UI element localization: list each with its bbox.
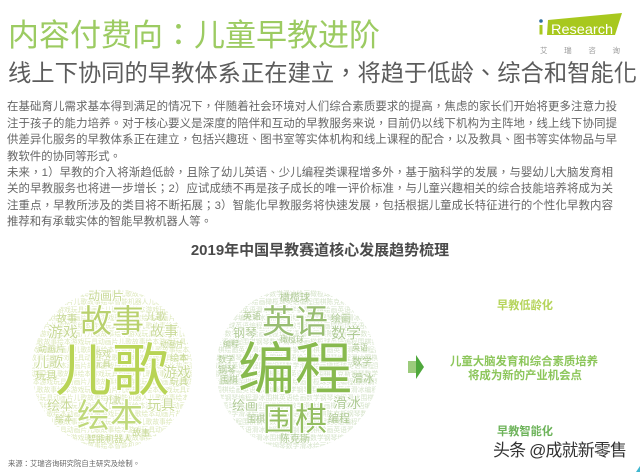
watermark: 头条 @成就新零售 <box>493 441 627 460</box>
word cloud: early education skills: 围棋绘画英语滑冰编程数学钢琴围棋绘画英语滑冰编程数学钢琴围棋绘画 <box>211 425 429 434</box>
word cloud: early education skills: 英语 <box>243 310 261 321</box>
word cloud: early education content: 游戏 <box>163 364 191 380</box>
word cloud: early education content: 动画片儿歌故事绘本游戏玩具动画片儿歌故事绘本游戏玩具动画片儿歌故事 <box>30 369 254 378</box>
corner mark <box>636 466 640 472</box>
word cloud: early education skills <box>216 290 378 449</box>
body text: 供差异化服务的早教体系正在建立，包括兴趣班、图书室等实体机构和线上课程的配合，以及教具、图书等实体物品与早 <box>7 132 617 146</box>
subtitle: 线上下协同的早教体系正在建立，将趋于低龄、综合和智能化 <box>8 60 637 86</box>
word cloud: early education skills: 钢琴数学滑冰绘画橄榄球英语编程围棋陈克斯钢琴数学滑冰绘画橄榄球英语 <box>211 329 435 338</box>
title: 内容付费向：儿童早教进阶 <box>8 18 380 53</box>
word cloud: early education skills: 橄榄球英语编程围棋钢琴数学滑冰绘画橄榄球英语编程围棋钢琴数学滑冰 <box>211 441 429 450</box>
word cloud: early education skills: 橄榄球 <box>280 291 310 304</box>
word cloud: early education skills: 围棋 <box>263 401 327 437</box>
word cloud: early education content: 游戏玩具动画片儿歌故事绘本智能机器人儿歌故事绘本游戏玩具动画片儿歌 <box>26 297 250 306</box>
trend: brain development and quality cultivation: 将成为新的产业机会点 <box>468 368 583 382</box>
word cloud: early education content: 故事绘本游戏玩具动画片儿歌故事绘本游戏玩具动画片儿歌故事绘本游戏 <box>30 305 248 314</box>
word cloud: early education skills: 绘画 <box>232 398 258 413</box>
word cloud: early education skills: 围棋 <box>247 413 265 424</box>
word cloud: early education content: 故事绘本游戏玩具动画片儿歌故事绘本游戏玩具动画片儿歌故事绘本游戏 <box>30 353 248 362</box>
chart heading: 2019年中国早教赛道核心发展趋势梳理 <box>191 241 449 259</box>
word cloud: early education content: 游戏玩具动画片儿歌故事绘本智能机器人儿歌故事绘本游戏玩具动画片儿歌 <box>26 345 250 354</box>
word cloud: early education skills: 围棋绘画英语滑冰编程数学钢琴围棋绘画英语滑冰编程数学钢琴围棋绘画 <box>211 345 429 354</box>
word cloud: early education skills: 数学钢琴编程滑冰围棋英语绘画数学钢琴编程滑冰围棋英语绘画数学钢琴 <box>215 433 433 442</box>
word cloud: early education skills: 橄榄球英语编程围棋钢琴数学滑冰绘画橄榄球英语编程围棋钢琴数学滑冰 <box>211 361 429 370</box>
word cloud: early education skills: 钢琴 <box>218 364 236 375</box>
word cloud: early education skills: 绘画 <box>331 312 351 325</box>
word cloud: early education skills: 围棋绘画英语滑冰编程数学钢琴围棋绘画英语滑冰编程数学钢琴围棋绘画 <box>215 385 433 394</box>
word cloud: early education content: 绘本游戏玩具动画片儿歌故事绘本游戏玩具动画片儿歌故事绘本游戏玩具 <box>26 329 244 338</box>
body text: 未来，1）早教的介入将渐趋低龄，且除了幼儿英语、少儿编程类课程增多外，基于脑科学的发展，与婴幼儿大脑发育相 <box>7 165 613 179</box>
word cloud: early education content: 绘本 <box>55 413 73 424</box>
logo: iResearch: Research <box>551 21 613 37</box>
body text: 注于孩子的能力培养。对于核心要义是深度的陪伴和互动的早教服务来说，目前仍以线下机构为主阵地，线上线下协同提 <box>7 116 618 130</box>
word cloud: early education content: 故事 <box>132 427 150 438</box>
source note: 来源：艾瑞咨询研究院自主研究及绘制。 <box>8 459 140 468</box>
word cloud: early education content: 游戏玩具动画片儿歌故事绘本智能机器人儿歌故事绘本游戏玩具动画片儿歌 <box>26 441 250 450</box>
word cloud: early education content: 玩具儿歌绘本动画片故事游戏玩具儿歌绘本动画片故事游戏玩具儿歌绘本 <box>26 361 244 370</box>
word cloud: early education content: 绘本 <box>47 398 73 413</box>
word cloud: early education skills: 围棋绘画英语滑冰编程数学钢琴围棋绘画英语滑冰编程数学钢琴围棋绘画 <box>215 305 433 314</box>
word cloud: early education content: 绘本游戏玩具动画片儿歌故事绘本游戏玩具动画片儿歌故事绘本游戏玩具 <box>26 425 244 434</box>
word cloud: early education content <box>32 290 192 449</box>
word cloud: early education content: 绘本 <box>170 352 188 363</box>
word cloud: early education skills: 英语编程围棋钢琴数学滑冰绘画橄榄球英语编程围棋钢琴数学滑冰绘画 <box>215 417 426 426</box>
word cloud: early education skills: 滑冰 <box>352 372 374 385</box>
word cloud: early education content: 智能机器人 <box>87 433 132 444</box>
word cloud: early education skills: 编程 <box>238 338 352 402</box>
trend: intelligent: 早教智能化 <box>497 424 553 438</box>
word cloud: early education content: 绘本游戏玩具动画片儿歌故事绘本游戏玩具动画片儿歌故事绘本游戏玩具 <box>26 377 244 386</box>
word cloud: early education skills: 钢琴数学滑冰绘画橄榄球英语编程围棋陈克斯钢琴数学滑冰绘画橄榄球英语 <box>211 409 435 418</box>
word cloud: early education skills: 英语编程围棋钢琴数学滑冰绘画橄榄球英语编程围棋钢琴数学滑冰绘画 <box>215 289 426 298</box>
word cloud: early education skills: 钢琴数学滑冰绘画橄榄球英语编程围棋陈克斯钢琴数学滑冰绘画橄榄球英语 <box>211 297 435 306</box>
word cloud: early education skills: 围棋 <box>220 374 238 385</box>
logo: iResearch: 艾瑞咨询 <box>540 45 620 55</box>
word cloud: early education content: 玩具 <box>170 377 188 387</box>
word cloud: early education skills: 陈克斯 <box>280 432 310 445</box>
word cloud: early education content: 动画片儿歌故事绘本游戏玩具动画片儿歌故事绘本游戏玩具动画片儿歌故事 <box>30 321 254 330</box>
word cloud: early education content: 儿歌 <box>146 310 166 323</box>
word cloud: early education content: 故事 <box>80 303 144 339</box>
word cloud: early education skills: 数学钢琴编程滑冰围棋英语绘画数学钢琴编程滑冰围棋英语绘画数学钢琴 <box>215 353 433 362</box>
word cloud: early education content: 故事 <box>57 312 77 325</box>
body text <box>7 99 618 228</box>
word cloud: early education skills: 橄榄球英语编程围棋钢琴数学滑冰绘画橄榄球英语编程围棋钢琴数学滑冰 <box>215 321 433 330</box>
word cloud: early education content: 儿歌故事绘本游戏玩具动画片儿歌故事绘本游戏玩具动画片儿歌故事绘本 <box>30 385 248 394</box>
word cloud: early education content: 儿歌 <box>105 395 121 405</box>
body text: 教软件的协同等形式。 <box>7 149 121 163</box>
word cloud: early education content: 儿歌故事绘本游戏玩具动画片儿歌故事绘本游戏玩具动画片儿歌故事绘本 <box>30 337 248 346</box>
word cloud: early education skills: 英语编程围棋钢琴数学滑冰绘画橄榄球英语编程围棋钢琴数学滑冰绘画 <box>211 377 422 386</box>
word cloud: early education content: 动画片 <box>160 339 184 349</box>
word cloud: early education skills: 数学钢琴编程滑冰围棋英语绘画数学钢琴编程滑冰围棋英语绘画数学钢琴 <box>211 313 429 322</box>
body text: 注重点，早教所涉及的类目将不断拓展；3）智能化早教服务将快速发展，包括根据儿童成长特征进行的个性化早教内容 <box>7 198 613 212</box>
word cloud: early education content: 动画片 <box>88 289 124 303</box>
word cloud: early education content: 动画片儿歌故事绘本游戏玩具动画片儿歌故事绘本游戏玩具动画片儿歌故事 <box>30 417 254 426</box>
body text: 推荐和有承载实体的智能早教机器人等。 <box>7 214 212 228</box>
word cloud: early education skills: 橄榄球英语编程围棋钢琴数学滑冰绘画橄榄球英语编程围棋钢琴数学滑冰 <box>215 401 433 410</box>
word cloud: early education content: 绘本 <box>77 397 143 434</box>
word cloud: early education content: 儿歌 <box>55 339 169 403</box>
word cloud: early education skills: 数学 <box>331 325 361 342</box>
word cloud: early education content: 动画片 <box>38 343 65 354</box>
word cloud: early education content: 玩具 <box>35 369 57 382</box>
word cloud: early education skills: 钢琴数学滑冰绘画橄榄球英语编程围棋陈克斯钢琴数学滑冰绘画橄榄球英语 <box>215 369 439 378</box>
word cloud: early education skills: 编程 <box>223 339 239 349</box>
body text: 关的早教服务也将进一步增长；2）应试成绩不再是孩子成长的唯一评价标准，与儿童兴趣相关的综合技能培养将成为关 <box>7 181 613 195</box>
word cloud: early education skills: 英语编程围棋钢琴数学滑冰绘画橄榄球英语编程围棋钢琴数学滑冰绘画 <box>215 337 426 346</box>
word cloud: early education skills: 英语 <box>262 303 328 340</box>
word cloud: early education content: 游戏 <box>48 324 78 341</box>
word cloud: early education content: 儿歌故事绘本游戏玩具动画片儿歌故事绘本游戏玩具动画片儿歌故事绘本 <box>30 433 248 442</box>
word cloud: early education content: 玩具 <box>93 359 111 369</box>
word cloud: early education content: 儿歌 <box>35 354 63 370</box>
word cloud: early education content: 故事 <box>150 323 178 339</box>
word cloud: early education content: 游戏玩具动画片儿歌故事绘本智能机器人儿歌故事绘本游戏玩具动画片儿歌 <box>26 393 250 402</box>
word cloud: early education content: 玩具儿歌绘本动画片故事游戏玩具儿歌绘本动画片故事游戏玩具儿歌绘本 <box>26 313 244 322</box>
word cloud: early education skills: 钢琴 <box>233 326 257 340</box>
word cloud: early education skills: 数学 <box>218 354 234 364</box>
word cloud: early education skills: 英语 <box>352 342 368 352</box>
word cloud: early education content: 玩具儿歌绘本动画片故事游戏玩具儿歌绘本动画片故事游戏玩具儿歌绘本 <box>26 409 244 418</box>
word cloud: early education skills: 橄榄球 <box>280 334 304 344</box>
body text: 在基础育儿需求基本得到满足的情况下，伴随着社会环境对人们综合素质要求的提高，焦虑的家长们开始将更多注意力投 <box>7 99 617 113</box>
logo: iResearch <box>539 13 622 55</box>
word cloud: early education skills: 数学钢琴编程滑冰围棋英语绘画数学钢琴编程滑冰围棋英语绘画数学钢琴 <box>211 393 429 402</box>
word cloud: early education skills: 滑冰 <box>333 395 361 411</box>
arrow <box>408 355 424 379</box>
word cloud: early education skills: 数学 <box>352 355 372 368</box>
word cloud: early education content: 游戏 <box>93 348 111 359</box>
trend: younger ages: 早教低龄化 <box>497 298 553 312</box>
word cloud: early education skills: 编程 <box>328 411 350 425</box>
trend: brain development and quality cultivation <box>450 354 599 382</box>
word cloud: early education content: 故事绘本游戏玩具动画片儿歌故事绘本游戏玩具动画片儿歌故事绘本游戏 <box>30 401 248 410</box>
word cloud: early education content: 玩具 <box>147 397 175 413</box>
word cloud: early education content: 儿歌故事绘本游戏玩具动画片儿歌故事绘本游戏玩具动画片儿歌故事绘本 <box>30 289 248 298</box>
trend: brain development and quality cultivation: 儿童大脑发育和综合素质培养 <box>450 354 599 368</box>
